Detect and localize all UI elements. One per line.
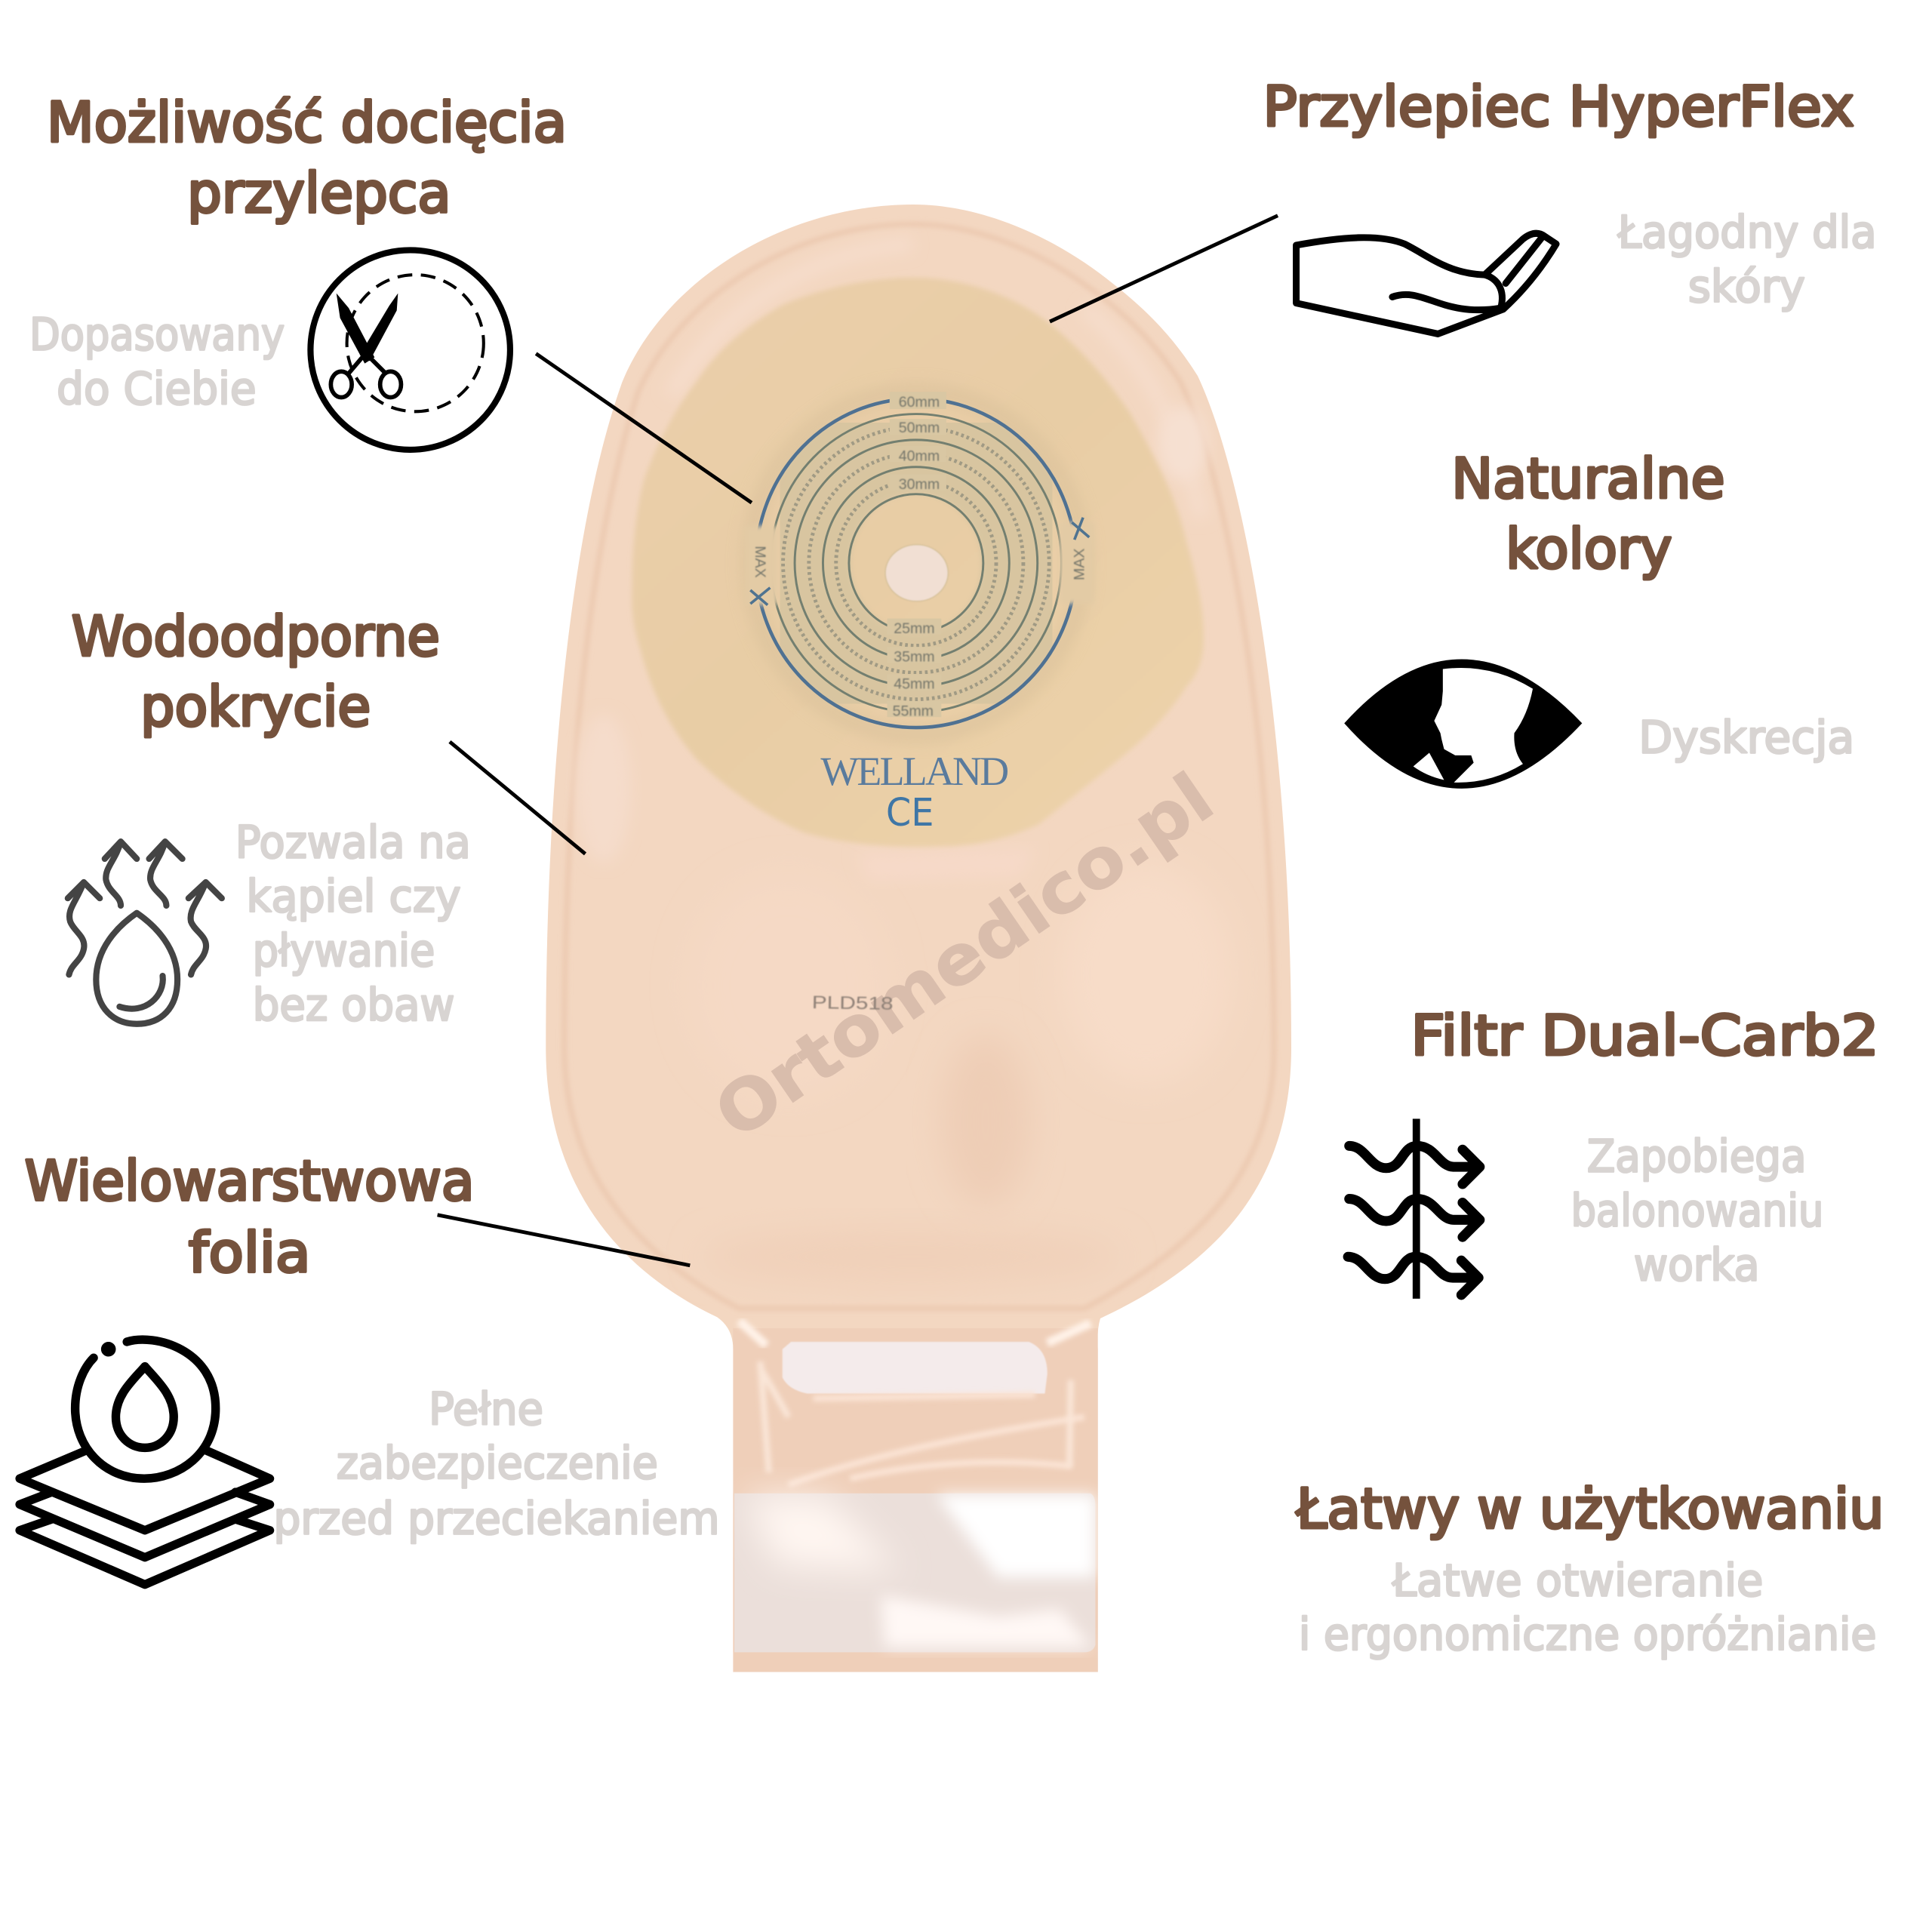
heading: Wodoodporne	[72, 605, 440, 669]
callout: Wodoodporne pokrycie	[68, 605, 471, 1031]
text: gentle on skin: Łagodny dla	[1617, 206, 1877, 258]
ring size labels: 35mm	[894, 649, 935, 666]
text: allows bathing: kąpiel czy	[247, 870, 461, 922]
icon: open hand	[1297, 233, 1556, 334]
heading: Możliwość docięcia	[47, 91, 567, 155]
text: gentle on skin: skóry	[1688, 260, 1805, 312]
pouch body	[546, 205, 1291, 1672]
adhesive plate	[632, 278, 1204, 847]
text: allows bathing: bez obaw	[253, 979, 454, 1031]
ring size labels: 50mm	[899, 420, 940, 436]
text: gentle on skin	[1617, 206, 1877, 312]
ring size labels: MAX	[1072, 549, 1088, 580]
ring size labels: 45mm	[894, 676, 935, 693]
heading: Wielowarstwowa	[25, 1149, 475, 1214]
heading	[47, 91, 567, 226]
ring size labels: 30mm	[899, 476, 940, 493]
ring size labels: 25mm	[894, 620, 935, 637]
icon: water drop with steam arrows	[68, 841, 222, 1024]
heading: Łatwy w użytkowaniu	[1296, 1477, 1884, 1541]
product: ostomy pouch	[546, 205, 1291, 1672]
ring size labels: 60mm	[899, 394, 940, 411]
brand name: WELLAND	[820, 749, 1009, 794]
heading	[25, 1149, 475, 1285]
product code: PLD518	[812, 992, 894, 1014]
text: prevents ballooning: Zapobiega	[1587, 1131, 1806, 1183]
callout: Filtr Dual-Carb2	[1348, 1004, 1879, 1299]
text: easy opening and emptying	[1299, 1554, 1877, 1660]
ring size labels	[752, 394, 1088, 720]
icon: scissors in circle	[310, 250, 510, 450]
callout: Łatwy w użytkowaniu	[1296, 1477, 1884, 1660]
text: fitted to you: do Ciebie	[57, 363, 257, 415]
callout: Wielowarstwowa folia	[20, 1149, 719, 1585]
measurement rings	[749, 392, 1082, 734]
text: prevents ballooning	[1571, 1131, 1823, 1291]
heading: folia	[189, 1221, 310, 1285]
text: allows bathing: Pozwala na	[235, 816, 471, 868]
icon: layers with drop	[20, 1340, 270, 1585]
text: prevents ballooning: worka	[1634, 1238, 1759, 1291]
text: fitted to you: Dopasowany	[29, 309, 285, 361]
text: leak protection: Pełne	[429, 1383, 543, 1435]
heading: przylepca	[187, 162, 451, 226]
text: easy opening and emptying: Łatwe otwieranie	[1392, 1554, 1763, 1606]
upper window	[783, 1342, 1048, 1394]
CE mark: CE	[886, 790, 934, 835]
ring size labels: 40mm	[899, 448, 940, 465]
heading: pokrycie	[140, 675, 371, 740]
heading	[1451, 448, 1725, 582]
callout: Naturalne kolory	[1344, 448, 1854, 789]
text: prevents ballooning: balonowaniu	[1571, 1184, 1823, 1236]
text: easy opening and emptying: i ergonomiczne opróżnianie	[1299, 1608, 1877, 1660]
text: leak protection	[273, 1383, 719, 1545]
icon: filter airflow	[1348, 1118, 1480, 1299]
heading: Filtr Dual-Carb2	[1411, 1004, 1879, 1069]
callout: Możliwość docięcia przylepca	[29, 91, 567, 450]
leader lines	[438, 216, 1278, 1266]
text: leak protection: przed przeciekaniem	[273, 1493, 719, 1545]
watermark: Ortomedico.pl	[700, 757, 1228, 1155]
text: leak protection: zabezpieczenie	[337, 1437, 658, 1489]
lower window	[734, 1494, 1095, 1652]
icon: eye with profile	[1344, 659, 1582, 789]
ring size labels: 55mm	[893, 703, 934, 720]
callout: Przylepiec HyperFlex	[1263, 75, 1877, 334]
stoma starter hole	[885, 545, 948, 601]
drainage tail	[733, 1321, 1098, 1672]
text: fitted to you	[29, 309, 285, 415]
ring label gaps	[888, 392, 946, 717]
heading: Przylepiec HyperFlex	[1263, 75, 1854, 140]
heading: Naturalne	[1451, 448, 1725, 512]
text: allows bathing	[235, 816, 471, 1031]
text: allows bathing: pływanie	[253, 924, 435, 977]
heading	[72, 605, 440, 740]
small blue scissor marks	[750, 518, 1089, 605]
heading: kolory	[1506, 518, 1672, 582]
ring size labels: MAX	[752, 546, 768, 578]
text: discretion: Dyskrecja	[1638, 712, 1854, 764]
